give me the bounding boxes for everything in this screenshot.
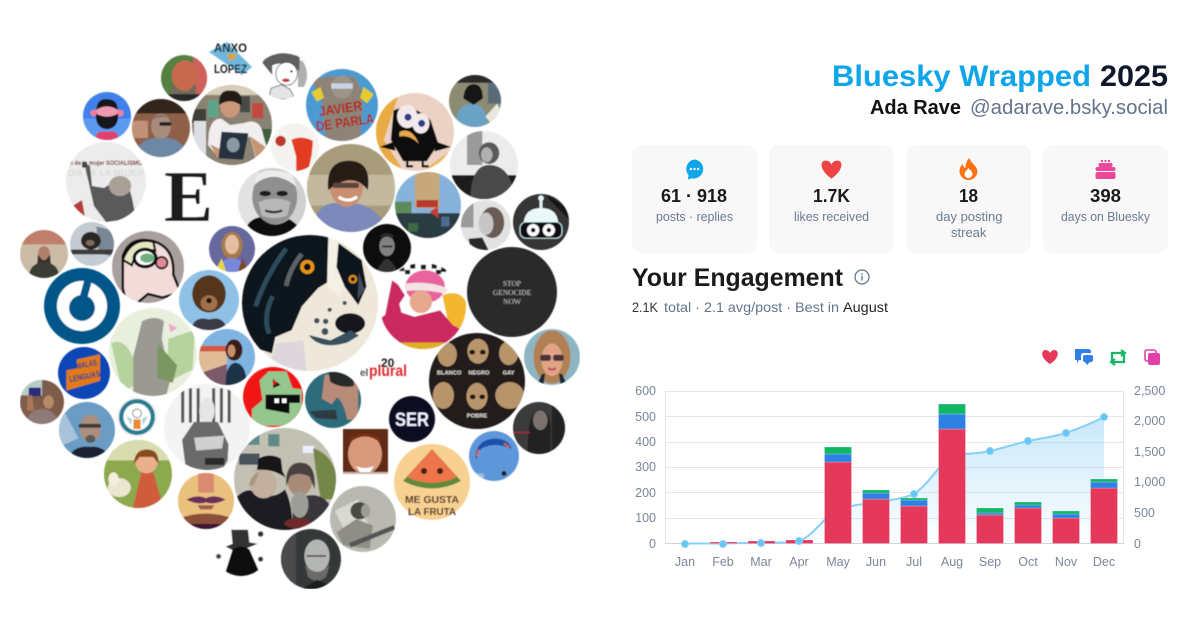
- avatar: moustache: [178, 473, 234, 529]
- left axis labels: 600: [635, 384, 656, 398]
- avatar: bearded man sketch: [281, 529, 341, 589]
- avatar: portrait in black and white: [238, 168, 306, 236]
- logo: elplural: [360, 356, 407, 380]
- left axis labels: 400: [635, 435, 656, 449]
- panel: likes received: [769, 145, 894, 253]
- avatar: El Espanol E logo: [147, 156, 229, 238]
- avatar: blue ring logo: [44, 268, 120, 344]
- avatar: Me Gusta La Fruta watermelon: ME GUSTA: [405, 494, 459, 506]
- avatar: black and white woman: [450, 131, 518, 199]
- avatar: square woman portrait: [343, 429, 388, 474]
- avatar: Malas Lenguas: MALAS: [75, 357, 98, 371]
- stat value: 1.7K: [813, 186, 850, 206]
- avatar: man selfie with phone: [20, 380, 64, 424]
- right axis labels: 0: [1134, 537, 1141, 551]
- left axis labels: 300: [635, 460, 656, 474]
- month labels: Oct: [1018, 555, 1038, 569]
- left axis labels: [635, 384, 656, 551]
- panel: days on Bluesky: [1043, 145, 1168, 253]
- avatar: man with book: [192, 85, 272, 165]
- month labels: Dec: [1093, 555, 1115, 569]
- avatar: woman with guitar: [330, 486, 396, 552]
- engagement summary: 2.1K: [632, 299, 659, 315]
- logo: elplural: 20: [381, 356, 395, 370]
- avatar: protest with banner: [395, 172, 461, 238]
- avatar: pixel dino: [243, 367, 303, 427]
- month labels: Apr: [789, 555, 809, 569]
- right axis labels: 2,500: [1134, 384, 1165, 398]
- avatar: socialism poster: [66, 142, 146, 222]
- line points: [682, 414, 1108, 548]
- month labels: Feb: [712, 555, 734, 569]
- month labels: Jun: [866, 555, 886, 569]
- right axis labels: [1134, 384, 1165, 551]
- heading: Your Engagement: Your Engagement: [632, 264, 844, 292]
- icon: flame: [960, 158, 978, 180]
- icon: heart: [822, 161, 841, 179]
- left axis labels: 100: [635, 511, 656, 525]
- left axis labels: 200: [635, 486, 656, 500]
- stacked bars: [710, 404, 1118, 544]
- bars: Jun: [862, 490, 890, 544]
- avatar: socialism poster: ón de la mujer SOCIALISMO: [66, 161, 142, 167]
- bars: Feb: [710, 542, 737, 544]
- right axis labels: 2,000: [1134, 414, 1165, 428]
- engagement summary: total · 2.1 avg/post · Best in: [664, 299, 839, 315]
- avatar: Stop Genocide Now: NOW: [503, 297, 522, 306]
- bars: Dec: [1090, 479, 1118, 544]
- bars: Jul: [900, 498, 928, 544]
- avatar: woman with glasses: [307, 144, 395, 232]
- icon: cake: [1096, 160, 1116, 179]
- avatar: round badge: [117, 397, 157, 437]
- stat label: posts · replies: [656, 209, 733, 224]
- stat value: 18: [959, 186, 978, 206]
- bars: Sep: [976, 508, 1004, 544]
- bars: Nov: [1052, 511, 1080, 544]
- avatar: brown dog: [179, 270, 239, 330]
- cumulative line: [685, 417, 1104, 544]
- avatar: Stop Genocide Now: STOP: [503, 279, 521, 288]
- avatar: big dog painting: [242, 235, 378, 371]
- avatar: painting of woman: [305, 372, 361, 428]
- icon: speech bubble: [686, 160, 703, 180]
- avatar: Stop Genocide Now: GENOCIDE: [493, 288, 532, 297]
- icon: reposts: [1111, 350, 1125, 365]
- cumulative area: [685, 417, 1104, 544]
- engagement chart: [635, 384, 1165, 569]
- avatar: blonde woman: [209, 226, 255, 272]
- avatar: red fist: [271, 123, 319, 171]
- avatar: woman on balcony: [199, 329, 255, 385]
- right axis labels: 1,500: [1134, 445, 1165, 459]
- avatar: Calimero: [376, 93, 454, 171]
- avatar: Anxo Lopez logo: [209, 41, 252, 76]
- avatar: striped collage woman: [164, 384, 250, 470]
- avatar: Malas Lenguas: LENGUAS: [68, 368, 101, 384]
- panel: posts and replies: [632, 145, 757, 253]
- title: Bluesky Wrapped: [832, 60, 1091, 93]
- left axis labels: 500: [635, 410, 656, 424]
- avatar cluster: [20, 41, 580, 589]
- right axis labels: 500: [1134, 506, 1155, 520]
- bars: May: [824, 447, 852, 544]
- stat label: streak: [951, 225, 987, 240]
- bars: Aug: [938, 404, 966, 544]
- avatar: Me Gusta La Fruta watermelon: LA FRUTA: [408, 506, 456, 518]
- avatar: Javier de Parla: JAVIER: [318, 98, 363, 119]
- title: 2025: [1100, 60, 1168, 93]
- avatar: skulls grid: NEGRO: [468, 370, 490, 376]
- avatar: skulls grid: GAY: [503, 370, 515, 376]
- stat value: 398: [1090, 186, 1121, 206]
- avatar: skulls grid: BLANCO: [437, 370, 462, 376]
- avatar: chimpanzee: [70, 222, 114, 266]
- avatar: bearded man outdoors: [20, 230, 68, 278]
- month labels: [675, 555, 1115, 569]
- month labels: Mar: [750, 555, 772, 569]
- avatar: Me Gusta La Fruta watermelon: [394, 444, 470, 520]
- icon: replies: [1075, 349, 1093, 365]
- engagement summary: August: [843, 299, 888, 315]
- icon: info: [855, 270, 869, 284]
- avatar: El Espanol E logo: E: [164, 156, 213, 237]
- avatar: marmot sketch: [109, 308, 197, 396]
- month labels: Nov: [1055, 555, 1078, 569]
- avatar: two men in street: [234, 428, 336, 530]
- month labels: Aug: [941, 555, 963, 569]
- avatar: pink bearded cartoon: [83, 92, 131, 141]
- logo: elplural: plural: [369, 363, 407, 380]
- avatar: Javier de Parla: DE PARLA: [315, 111, 375, 134]
- avatar: skulls grid: POBRE: [467, 413, 487, 419]
- right axis labels: 1,000: [1134, 475, 1165, 489]
- avatar: woman in grayscale: [461, 200, 511, 250]
- panel: day posting streak: [906, 145, 1031, 253]
- avatar: Darth Vader at laptop: [449, 75, 501, 127]
- avatar: socialism poster: DIA DE LA MUJER: [68, 168, 145, 178]
- avatar: skulls grid: [429, 333, 525, 429]
- bars: Oct: [1014, 502, 1042, 544]
- avatar: dark portrait: [363, 224, 411, 272]
- avatar: cartoon woman: [259, 51, 307, 99]
- stat value: 61 · 918: [661, 186, 727, 206]
- avatar: man in sunglasses: [132, 99, 190, 157]
- user name and handle: Ada Rave: [870, 97, 961, 119]
- avatar: hat silhouette: [216, 529, 264, 577]
- avatar: Javier de Parla: [306, 69, 378, 141]
- stat label: likes received: [794, 209, 869, 224]
- avatar: bald man with glasses: [59, 402, 115, 458]
- avatar: Heidi: [104, 440, 172, 508]
- avatar: Stop Genocide Now: [467, 247, 557, 337]
- avatar: woman in dark: [513, 402, 565, 454]
- bars: Apr: [786, 540, 813, 544]
- avatar: Bender: [513, 194, 569, 250]
- month labels: Jul: [906, 555, 922, 569]
- left axis labels: 0: [649, 537, 656, 551]
- avatar: Cadena SER: SER: [395, 410, 429, 431]
- avatar: bald man: [161, 55, 207, 101]
- month labels: Jan: [675, 555, 695, 569]
- avatar: cartoon with green glasses: [112, 231, 184, 303]
- user name and handle: @adarave.bsky.social: [970, 97, 1168, 119]
- avatar: pink helmet racer: [380, 263, 466, 349]
- chart legend icons: [1042, 349, 1160, 365]
- avatar: Cadena SER: [389, 396, 435, 442]
- icon: quotes: [1145, 350, 1160, 365]
- logo: elplural: el: [360, 368, 369, 379]
- user name and handle: [870, 97, 1168, 119]
- avatar: woman with sunglasses: [524, 329, 580, 385]
- avatar: Anxo Lopez logo: LOPEZ: [214, 62, 247, 76]
- avatar: paraglider: [469, 431, 519, 481]
- month labels: Sep: [979, 555, 1001, 569]
- avatar: Malas Lenguas: [58, 347, 110, 399]
- bars: Mar: [748, 541, 775, 544]
- stat label: days on Bluesky: [1061, 209, 1150, 224]
- icon: likes: [1042, 350, 1058, 364]
- avatar: Anxo Lopez logo: ANXO: [214, 41, 247, 55]
- month labels: May: [826, 555, 851, 569]
- stat label: day posting: [936, 209, 1002, 224]
